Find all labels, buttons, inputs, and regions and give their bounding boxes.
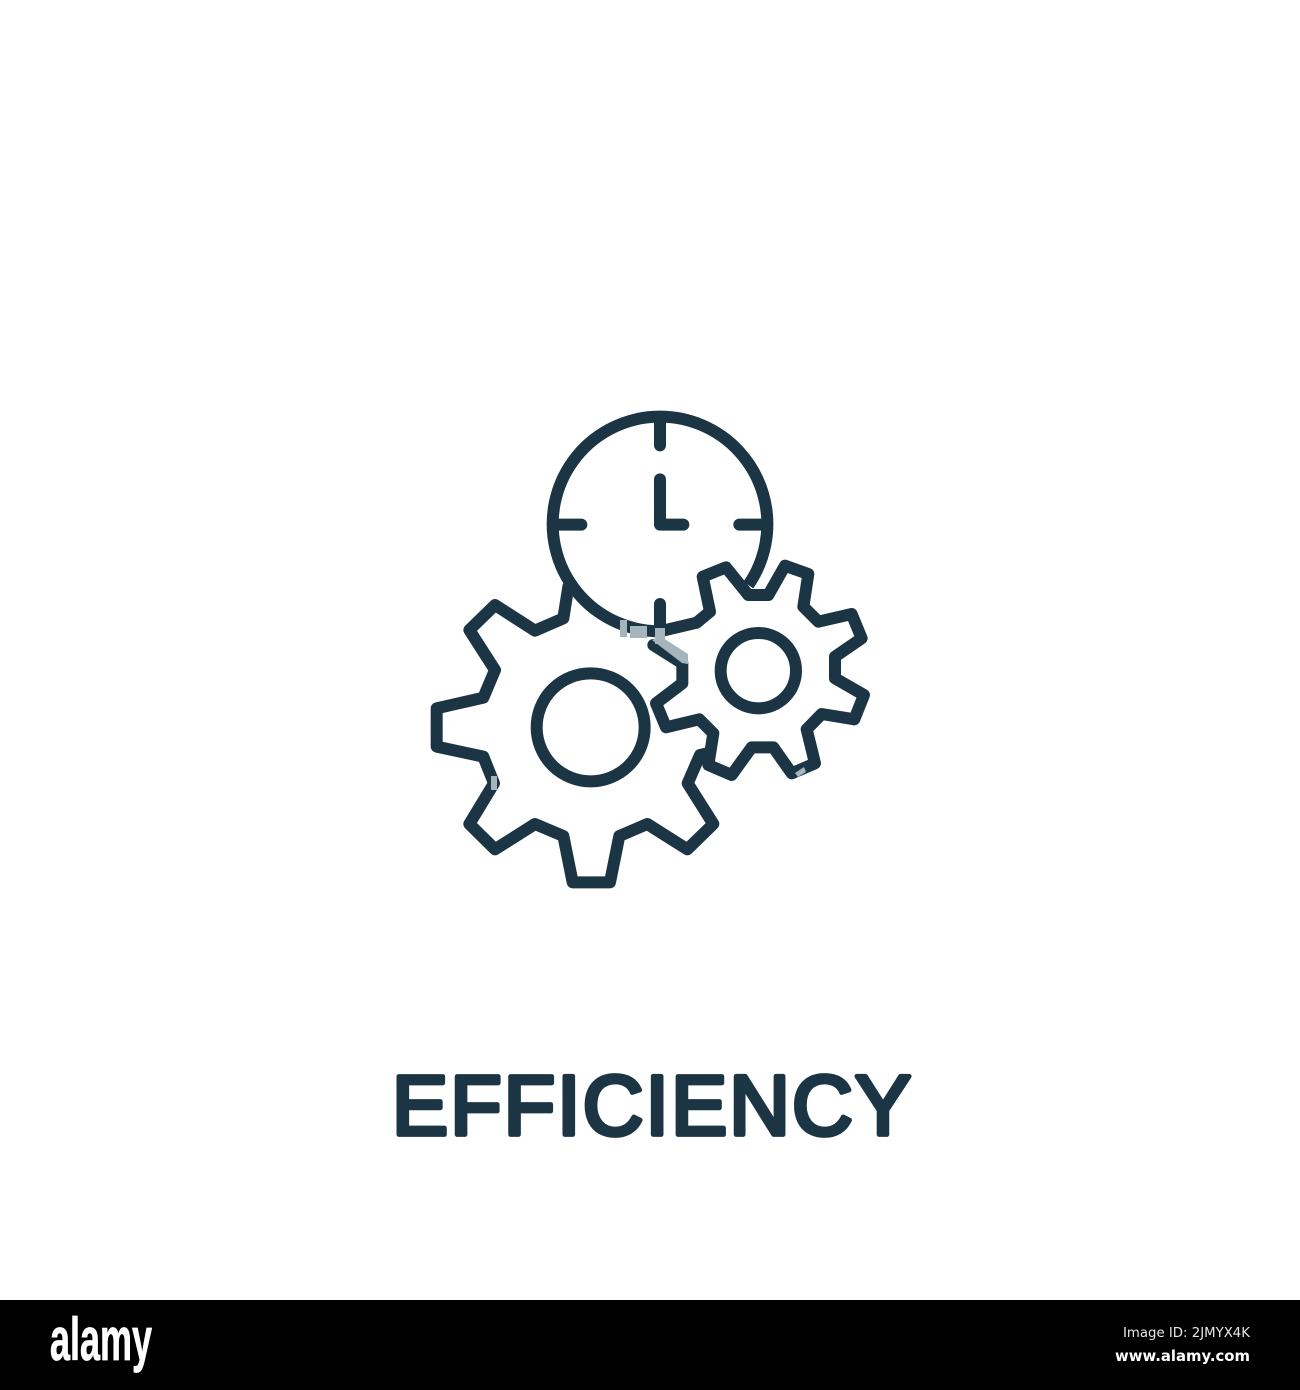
icon: small gear: [653, 566, 864, 775]
icon: large gear: [437, 587, 713, 882]
image id: Image ID: 2JMYX4K: [1123, 1325, 1251, 1341]
website: www.alamy.com: [1115, 1347, 1250, 1365]
title: EFFICIENCY: [392, 1058, 911, 1152]
icon: clock: [553, 417, 767, 631]
footer logo: alamy: [50, 1306, 152, 1373]
icon: clock with two gears: [437, 417, 864, 882]
footer bar: [0, 1300, 1300, 1390]
watermark fragments over the icon: [491, 620, 806, 790]
